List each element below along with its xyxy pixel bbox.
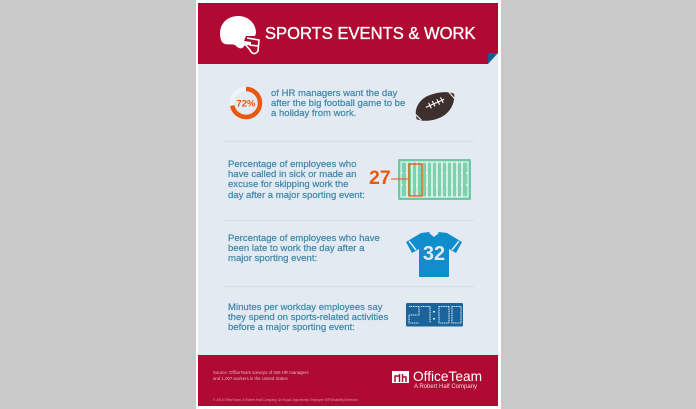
- text: called in sick: Percentage of employees who: [228, 159, 356, 170]
- icon: scoreboard 27:00: [406, 303, 463, 326]
- text: HR managers: after the big football game to be: [271, 98, 405, 109]
- icon: logo mark: [392, 371, 409, 383]
- text: minutes per workday: before a major sporting event:: [228, 322, 355, 333]
- page sheet: [196, 0, 501, 409]
- panel: body background: [198, 53, 498, 355]
- icon: header fold: [488, 53, 498, 64]
- stat: 72% donut: 72%: [236, 98, 256, 110]
- text: HR managers: of HR managers want the day: [271, 88, 397, 99]
- text: called in sick: [228, 159, 365, 201]
- logo: OfficeTeam: [392, 369, 482, 390]
- text: late to work: Percentage of employees who have: [228, 233, 380, 244]
- text: called in sick: have called in sick or made an: [228, 169, 356, 180]
- panel: header banner: [198, 3, 498, 64]
- text: late to work: major sporting event:: [228, 253, 317, 264]
- tagline: A Robert Half Company: [414, 384, 477, 390]
- text: late to work: been late to work the day after a: [228, 243, 364, 254]
- icon: football helmet: [220, 16, 260, 54]
- text: minutes per workday: they spend on sports-related activities: [228, 312, 388, 323]
- stat: 72% donut: [230, 86, 262, 120]
- text: called in sick: day after a major sporting event:: [228, 190, 365, 201]
- text: HR managers: a holiday from work.: [271, 108, 356, 119]
- text: HR managers: [271, 88, 405, 119]
- panel: footer: [198, 355, 498, 406]
- icon: football field: [391, 159, 471, 200]
- stat: 27 field: [369, 159, 471, 200]
- text: minutes per workday: [228, 302, 388, 333]
- heading: SPORTS EVENTS & WORK: [265, 23, 476, 43]
- icon: jersey 32: 32: [423, 243, 445, 265]
- text: late to work: [228, 233, 380, 264]
- text: source: and 1,007 workers in the United States: [213, 376, 288, 380]
- wordmark: OfficeTeam: [413, 369, 482, 384]
- text: copyright: © 2015 OfficeTeam. A Robert Half Company. An Equal Opportunity Employer M/F/Disability/Veterans.: [213, 398, 359, 402]
- text: called in sick: excuse for skipping work the: [228, 179, 348, 190]
- icon: football: [416, 92, 454, 121]
- icon: jersey 32: [406, 232, 462, 277]
- text: minutes per workday: Minutes per workday employees say: [228, 302, 382, 313]
- text: source: [213, 370, 309, 381]
- number 27: 27: [369, 167, 391, 189]
- text: source: Source: OfficeTeam surveys of 306 HR managers: [213, 370, 309, 375]
